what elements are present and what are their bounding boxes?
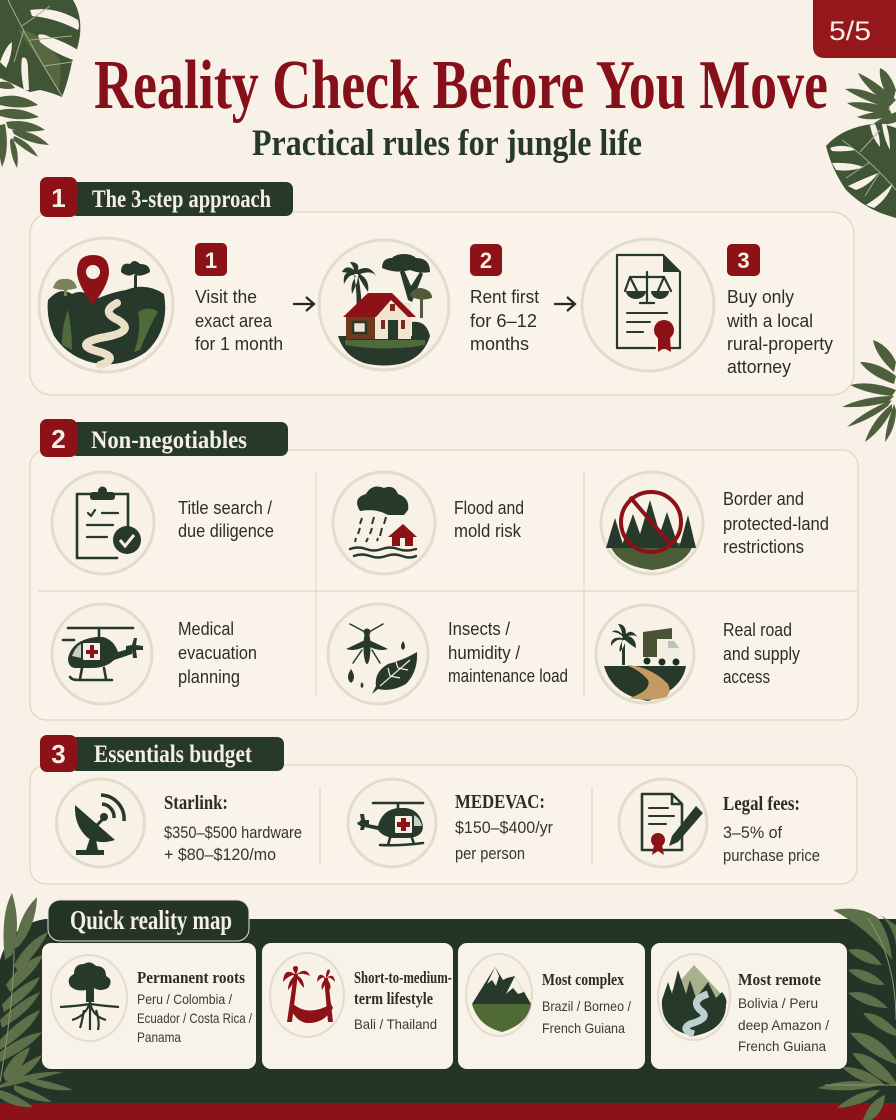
text: short-to-medium-term lifestyle: Short-to-medium- [354, 968, 452, 987]
text: permanent roots: Peru / Colombia / [137, 991, 232, 1007]
icon: legal document and pen [619, 779, 707, 867]
text: border and protected land: restrictions [723, 537, 804, 557]
text: starlink [164, 792, 302, 864]
text: most remote: Bolivia / Peru [738, 995, 818, 1011]
text: legal fees: Legal fees: [723, 793, 800, 815]
text: insects humidity maintenance: Insects / [448, 619, 510, 639]
icon: insect, droplets and leaf [328, 604, 428, 704]
text: road and supply [723, 620, 800, 687]
icon: map pin and jungle road [39, 238, 173, 372]
text: medical evacuation: planning [178, 667, 240, 687]
text: starlink: Starlink: [164, 792, 228, 814]
icon: medevac helicopter [348, 779, 436, 867]
leaf: right monstera [826, 124, 896, 218]
text: flood and mold: Flood and [454, 498, 524, 518]
text: medical evacuation: evacuation [178, 643, 257, 663]
text: starlink: + $80–$120/mo [164, 846, 276, 864]
icon: truck on a dirt road [596, 605, 694, 703]
text: permanent roots: Permanent roots [137, 968, 245, 987]
text: step 1: exact area [195, 311, 273, 331]
step badge 1 [195, 243, 227, 276]
text: step 2: for 6–12 [470, 311, 537, 331]
text: step 1: for 1 month [195, 334, 283, 354]
icon: satellite dish [56, 779, 144, 867]
text: legal fees: 3–5% of [723, 824, 782, 842]
panel: the 3-step approach [30, 177, 854, 395]
text: step 1: Visit the [195, 287, 257, 307]
text: insects humidity maintenance: maintenance load [448, 666, 568, 686]
panel: quick reality map [0, 893, 896, 1120]
icon: palms and hammock [270, 953, 344, 1037]
text: insects humidity maintenance [448, 619, 568, 686]
text: most complex [542, 970, 631, 1036]
text: road and supply: and supply [723, 644, 800, 664]
text: short-to-medium-term lifestyle [354, 968, 452, 1032]
text: step 2: Rent first [470, 287, 539, 307]
text: border and protected land: protected-land [723, 514, 829, 534]
leaf: bottom-left fronds [0, 893, 73, 1107]
text: insects humidity maintenance: humidity / [448, 643, 520, 663]
section header 1 [40, 177, 293, 217]
card: permanent roots [42, 943, 256, 1069]
red footer band [0, 1103, 896, 1120]
text: most complex: Brazil / Borneo / [542, 998, 631, 1014]
section header 2 [40, 419, 288, 457]
leaf: left fern [0, 82, 49, 168]
text: short-to-medium-term lifestyle: term lifestyle [354, 989, 433, 1008]
card: most complex [458, 943, 645, 1069]
text: medical evacuation [178, 619, 257, 687]
text: step 3: with a local [726, 311, 813, 331]
text: permanent roots: Panama [137, 1029, 181, 1045]
page badge 5/5: 5/5 [829, 16, 871, 46]
section header 2: 2 [51, 424, 66, 454]
text: step 1 [195, 287, 283, 354]
text: legal fees [723, 793, 820, 865]
text: road and supply: Real road [723, 620, 792, 640]
panel: non-negotiables [30, 419, 858, 720]
text: border and protected land [723, 489, 829, 557]
text: most complex: Most complex [542, 970, 624, 989]
text: short-to-medium-term lifestyle: Bali / Thailand [354, 1016, 437, 1032]
text: border and protected land: Border and [723, 489, 804, 509]
icon: house in the jungle [319, 240, 449, 370]
step badge 1: 1 [205, 248, 217, 273]
text: legal fees: purchase price [723, 847, 820, 865]
text: medevac: per person [455, 845, 525, 863]
text: step 3: Buy only [727, 287, 794, 307]
section header 3 [40, 735, 284, 772]
heading pill: Quick reality map [70, 905, 232, 935]
arrow 1 [293, 297, 314, 311]
text: step 2 [470, 287, 539, 354]
text: permanent roots: Ecuador / Costa Rica / [137, 1010, 252, 1026]
text: most remote: Most remote [738, 970, 821, 989]
text: permanent roots [137, 968, 252, 1045]
green band [0, 919, 896, 1104]
subtitle: Practical rules for jungle life [252, 123, 642, 164]
heading pill [48, 900, 249, 941]
text: title search [178, 498, 274, 541]
leaf: bottom-right fronds [817, 909, 896, 1120]
icon: legal document with scales [582, 239, 714, 371]
icon: river through forest [658, 954, 730, 1040]
step badge 3: 3 [737, 248, 750, 273]
icon: tree with roots [51, 955, 127, 1041]
section header 3: 3 [51, 739, 66, 769]
text: most complex: French Guiana [542, 1020, 625, 1036]
icon: clipboard checklist [52, 472, 154, 574]
arrow 2 [554, 297, 575, 311]
section header 2: Non-negotiables [91, 427, 247, 454]
text: medevac: $150–$400/yr [455, 819, 553, 837]
text: step 2: months [470, 334, 529, 354]
text: step 3: attorney [727, 357, 791, 377]
text: starlink: $350–$500 hardware [164, 824, 302, 842]
text: most remote [738, 970, 829, 1054]
leaf: right mid fern [842, 340, 896, 442]
card: short-to-medium-term lifestyle [262, 943, 453, 1069]
section header 3: Essentials budget [94, 741, 253, 768]
text: title search: Title search / [178, 498, 272, 518]
icon: medical helicopter [52, 604, 152, 704]
text: title search: due diligence [178, 521, 274, 541]
card: most remote [651, 943, 847, 1069]
text: medevac: MEDEVAC: [455, 791, 545, 813]
section header 1: The 3-step approach [92, 186, 271, 213]
text: flood and mold: mold risk [454, 521, 522, 541]
step badge 3 [727, 244, 760, 276]
text: most remote: deep Amazon / [738, 1017, 829, 1033]
icon: mountains [466, 954, 532, 1036]
leaf: top-left monstera [0, 0, 80, 97]
step badge 2 [470, 244, 502, 276]
section header 1: 1 [51, 183, 66, 213]
text: step 3: rural-property [727, 334, 833, 354]
icon: flood and rain [333, 472, 435, 574]
leaf: top-right fern [845, 68, 896, 125]
step badge 2: 2 [480, 248, 492, 273]
text: most remote: French Guiana [738, 1038, 826, 1054]
page badge 5/5 [813, 0, 896, 58]
text: medical evacuation: Medical [178, 619, 234, 639]
text: flood and mold [454, 498, 524, 541]
icon: no entry over protected forest [601, 472, 703, 574]
text: road and supply: access [723, 667, 770, 687]
text: step 3 [726, 287, 833, 377]
panel: essentials budget [30, 735, 857, 884]
text: medevac [455, 791, 553, 863]
